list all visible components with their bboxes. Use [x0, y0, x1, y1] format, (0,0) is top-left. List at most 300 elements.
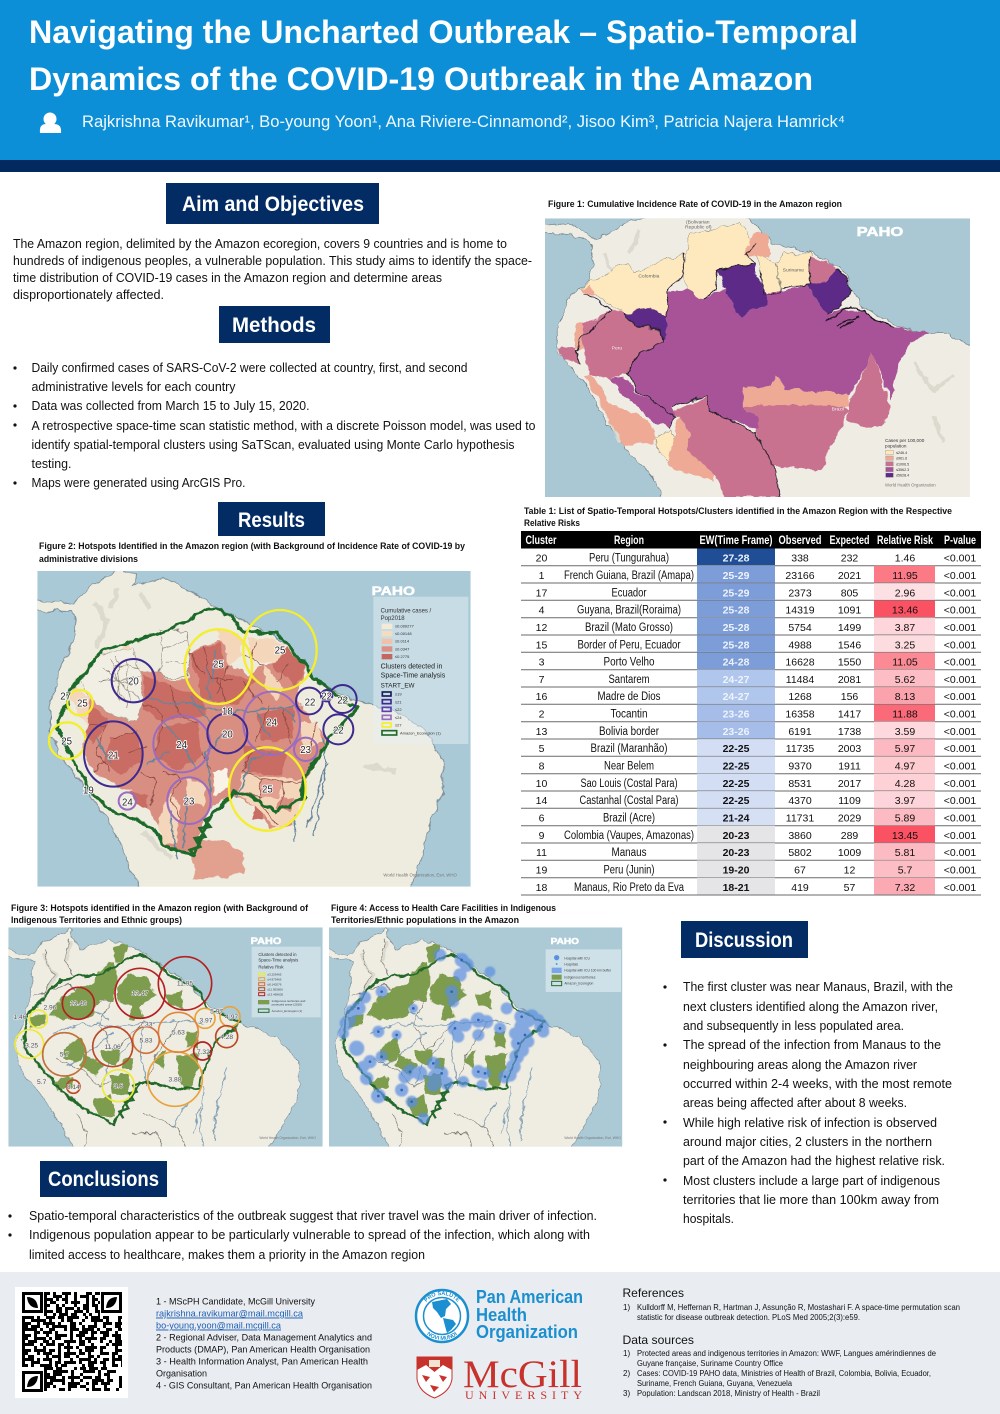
legend: Indigenous territories and — [272, 999, 306, 1003]
map: figure 2 hotspots — [20, 568, 471, 898]
row: cluster 9 — [539, 830, 976, 842]
row: cluster 2: 11.88 — [892, 709, 918, 721]
row: cluster 4 — [539, 605, 976, 617]
row: cluster 2 — [539, 709, 976, 721]
map: figure 3 hotspots and indigenous territories — [0, 927, 323, 1160]
row: cluster 7: <0.001 — [944, 674, 976, 686]
text block: discussion bullets: around major cities, 2 clusters in the northern — [683, 1134, 932, 1149]
text block: methods bullets: Maps were generated using ArcGIS Pro. — [32, 475, 246, 490]
row: cluster 5: 11735 — [786, 743, 814, 755]
text block: conclusions bullets — [8, 1208, 597, 1262]
text block: methods bullets: Data was collected from March 15 to July 15, 2020. — [32, 398, 310, 413]
row: cluster 14: Castanhal (Costal Para) — [580, 795, 679, 807]
row: cluster 3: 1550 — [838, 657, 861, 669]
caption: figure 3: Indigenous Territories and Ethnic groups) — [11, 915, 182, 926]
cluster labels — [14, 981, 238, 1091]
map labels: (Bolivarian — [686, 219, 710, 225]
table: clusters — [521, 531, 981, 895]
row: cluster 15: 15 — [536, 639, 547, 651]
legend: ≤3.253465 — [267, 973, 282, 977]
table header: EW(Time Frame) — [700, 535, 773, 547]
table row lines — [521, 566, 981, 895]
title — [29, 14, 858, 97]
row: cluster 20: 20 — [536, 553, 547, 565]
row: cluster 20: <0.001 — [944, 553, 976, 565]
cluster labels: 11.95 — [177, 981, 193, 988]
cluster labels: 25 — [77, 698, 88, 709]
row: cluster 7: 24-27 — [723, 674, 750, 686]
cluster labels: 5.7 — [60, 1052, 69, 1059]
footer band — [0, 1272, 1000, 1414]
PAHO logo text: PAHO — [551, 936, 579, 946]
text block: references: 1) — [623, 1303, 630, 1312]
row: cluster 17: Ecuador — [612, 587, 647, 599]
legend: ≤4.973465 — [267, 978, 282, 982]
cluster labels: 20 — [222, 729, 233, 740]
text block: data sources: Protected areas and indigenous territories in Amazon: WWF, Langues amérindiennes de — [637, 1349, 937, 1358]
legend: Amazon_Ecoregion — [564, 982, 594, 986]
row: cluster 16: 1268 — [788, 691, 812, 703]
heading: Conclusions — [40, 1161, 167, 1197]
legend: Amazon_Ecoregion (1) — [272, 1009, 302, 1013]
cluster labels: 23 — [184, 796, 194, 807]
map labels: Republic of) — [685, 225, 712, 231]
PAHO logo text: PAHO — [857, 224, 903, 239]
row: cluster 18: 57 — [844, 882, 855, 894]
legend: Hospitals — [564, 962, 578, 966]
cluster labels: 22 — [337, 696, 348, 707]
row: cluster 18: 18-21 — [723, 882, 750, 894]
row: cluster 4: 1091 — [838, 605, 861, 617]
row: cluster 7: 7 — [539, 674, 545, 686]
row: cluster 14: 1109 — [838, 795, 861, 807]
cluster labels: 2.96 — [44, 1005, 57, 1012]
map credit: World Health Organization, Esri, WHO — [259, 1136, 316, 1140]
legend panel: ≤21 — [395, 699, 402, 704]
row: cluster 3: Porto Velho — [604, 657, 654, 669]
row: cluster 5: Brazil (Maranhão) — [590, 743, 668, 755]
cluster labels: 24 — [266, 718, 278, 729]
authors: Rajkrishna Ravikumar¹, Bo-young Yoon¹, Ana Riviere-Cinnamond², Jisoo Kim³, Patricia Najera Hamrick⁴ — [82, 113, 845, 131]
row: cluster 13: 6191 — [788, 726, 812, 738]
text block: conclusions bullets: Spatio-temporal characteristics of the outbreak suggest that river travel was the main driver of infection. — [29, 1208, 597, 1223]
legend panel: ≤24 — [395, 715, 402, 720]
row: cluster 14 — [536, 795, 976, 807]
logo: Pan American Health Organization: Organization — [476, 1321, 578, 1342]
row: cluster 1: 2021 — [838, 570, 861, 582]
row: cluster 14: 14 — [536, 795, 547, 807]
legend: ≤3562.3 — [896, 468, 909, 472]
header band — [0, 0, 1000, 172]
map labels: Ecuador — [580, 317, 599, 323]
map: figure 4 health care access — [329, 927, 622, 1147]
row: cluster 9: 289 — [841, 830, 858, 842]
row: cluster 13: 13 — [536, 726, 547, 738]
text block: affiliations — [156, 1296, 372, 1392]
row: cluster 14: 22-25 — [723, 795, 750, 807]
row: cluster 12: Brazil (Mato Grosso) — [585, 622, 673, 634]
caption: figure 2: administrative divisions — [39, 554, 138, 565]
table header: Expected — [830, 535, 870, 547]
row: cluster 10: 4.28 — [895, 778, 915, 790]
row: cluster 8: 1911 — [838, 761, 861, 773]
text block: data sources: Guyane française, Suriname Country Office — [637, 1359, 784, 1368]
text block: references: statistic for disease outbreak detection. PLoS Med 2005;2(3):e59. — [637, 1313, 860, 1322]
row: cluster 16: 8.13 — [895, 691, 915, 703]
row: cluster 7: 11484 — [786, 674, 814, 686]
row: cluster 3: 11.05 — [892, 657, 918, 669]
map labels: Suriname — [783, 267, 804, 273]
logo: Pan American Health Organization — [414, 1286, 583, 1344]
PAHO logo text: PAHO — [372, 584, 415, 598]
row: cluster 10: 2017 — [838, 778, 861, 790]
row: cluster 3: 24-28 — [723, 657, 750, 669]
row: cluster 12: 5754 — [788, 622, 812, 634]
map credit: World Health Organization, Esri, WHO — [564, 1136, 621, 1140]
row: cluster 6: 5.89 — [895, 813, 915, 825]
row: cluster 5: 5 — [539, 743, 545, 755]
row: cluster 17: 17 — [536, 587, 547, 599]
row: cluster 13: 1738 — [838, 726, 861, 738]
title: Navigating the Uncharted Outbreak – Spatio-Temporal — [29, 14, 858, 50]
text block: affiliations: bo-young.yoon@mail.mcgill.ca — [156, 1320, 282, 1332]
text block: aim: time distribution of COVID-19 cases in the Amazon region and determine areas — [13, 270, 442, 285]
logo: Pan American Health Organization: NOVI MUNDI — [427, 1332, 457, 1340]
row: cluster 5 — [539, 743, 976, 755]
text block: references — [622, 1286, 960, 1322]
row: cluster 15: 25-28 — [723, 639, 750, 651]
legend panel: Space-Time analysis — [381, 673, 446, 680]
row: cluster 19: Peru (Junin) — [604, 864, 655, 876]
row: cluster 1: 23166 — [785, 570, 815, 582]
row: cluster 6: 21-24 — [723, 813, 750, 825]
row: cluster 5: <0.001 — [944, 743, 976, 755]
legend: ≤1006.5 — [896, 462, 909, 466]
row: cluster 3 — [539, 657, 976, 669]
row: cluster 18: 18 — [536, 882, 547, 894]
heading: Aim and Objectives: Aim and Objectives — [182, 193, 364, 216]
row: cluster 16: 24-27 — [723, 691, 750, 703]
logo: McGill University — [417, 1353, 582, 1402]
PAHO logo text: PAHO — [251, 936, 281, 946]
row: cluster 14: <0.001 — [944, 795, 976, 807]
row: cluster 20: 232 — [841, 553, 858, 565]
row: cluster 13: <0.001 — [944, 726, 976, 738]
text block: discussion bullets: The first cluster was near Manaus, Brazil, with the — [683, 979, 953, 994]
row: cluster 11: Manaus — [612, 847, 647, 859]
legend: ≤961.6 — [896, 457, 907, 461]
legend panel: Pop2018 — [381, 616, 405, 622]
row: cluster 1: French Guiana, Brazil (Amapa) — [564, 570, 694, 582]
row: cluster 17: 2.96 — [895, 587, 915, 599]
row: cluster 6: 11731 — [786, 813, 814, 825]
hospital points — [357, 959, 543, 1103]
text block: data sources: Data sources — [622, 1333, 694, 1347]
caption: table 1: Relative Risks — [524, 518, 580, 529]
icon: author person — [40, 112, 61, 133]
cluster labels: 3.25 — [25, 1042, 38, 1049]
row: cluster 11: 5802 — [788, 847, 812, 859]
logo: Pan American Health Organization: Pan American — [476, 1286, 583, 1307]
table header: P-value — [944, 535, 976, 547]
text block: methods bullets: identify spatial-temporal clusters using SaTScan, evaluated using Monte Carlo hypothesis — [32, 437, 515, 452]
legend: Hospital with ICU — [564, 956, 590, 960]
row: cluster 10: <0.001 — [944, 778, 976, 790]
logo: McGill University: McGill — [463, 1353, 582, 1396]
legend panel: ≤0.00148 — [395, 631, 412, 636]
text block: conclusions bullets: Indigenous population appear to be particularly vulnerable to spread of the infection, which along with — [29, 1227, 590, 1242]
legend panel — [373, 597, 468, 744]
Amazon ecoregion outline — [57, 608, 357, 855]
row: cluster 9: 20-23 — [723, 830, 750, 842]
row: cluster 20: Peru (Tungurahua) — [589, 553, 669, 565]
text block: discussion bullets: occurred within 2-4 weeks, with the most remote — [683, 1076, 952, 1091]
row: cluster 11 — [536, 847, 976, 859]
hospital buffers — [338, 949, 549, 1124]
cluster labels: 4.97 — [225, 1014, 238, 1021]
row: cluster 8: 4.97 — [895, 761, 915, 773]
table header: Region — [614, 535, 644, 547]
row: cluster 2: 1417 — [838, 709, 861, 721]
row: cluster 18: 419 — [791, 882, 809, 894]
row: cluster 18: 7.32 — [895, 882, 915, 894]
text block: affiliations: Organisation — [156, 1368, 207, 1380]
row: cluster 15 — [536, 639, 976, 651]
row: cluster 8: 22-25 — [723, 761, 750, 773]
text block: affiliations: 3 - Health Information Analyst, Pan American Health — [156, 1356, 368, 1368]
heading: Methods — [219, 306, 330, 343]
caption: figure 4 — [331, 903, 556, 926]
cluster labels: 22 — [333, 725, 344, 736]
cluster circles: yellow — [49, 610, 317, 831]
cluster labels: 23 — [300, 745, 311, 756]
logo: Pan American Health Organization: PRO SALUTE — [424, 1291, 460, 1302]
text block: references: Kulldorff M, Heffernan R, Hartman J, Assunção R, Mostashari F. A space-time permutation scan — [637, 1303, 960, 1312]
text block: discussion bullets: While high relative risk of infection is observed — [683, 1115, 937, 1130]
row: cluster 5: 22-25 — [723, 743, 750, 755]
legend: ≤11.955606 — [267, 988, 283, 992]
cluster labels: 25 — [213, 660, 224, 671]
row: cluster 2: Tocantin — [610, 709, 648, 721]
row: cluster 17: 2373 — [788, 587, 812, 599]
cluster circles: dark purple — [84, 659, 357, 787]
row: cluster 3: 16628 — [785, 657, 815, 669]
row: cluster 17: <0.001 — [944, 587, 976, 599]
row: cluster 19: <0.001 — [944, 864, 976, 876]
text block: discussion bullets: territories that lie more than 100km away from — [683, 1192, 939, 1207]
legend panel: Clusters detected in — [381, 664, 443, 671]
heading: Results — [218, 502, 325, 536]
legend — [885, 438, 925, 478]
text block: discussion bullets: next clusters identified along the Amazon river, — [683, 999, 938, 1014]
text block: methods bullets — [13, 360, 535, 490]
row: cluster 4: 13.46 — [892, 605, 918, 617]
row: cluster 6: 6 — [539, 813, 545, 825]
legend — [546, 949, 621, 992]
row: cluster 2: 23-26 — [723, 709, 750, 721]
legend: Indigenous territories — [564, 975, 596, 979]
cluster labels: 5.7 — [37, 1079, 47, 1086]
row: cluster 2: <0.001 — [944, 709, 976, 721]
legend panel: ≤19 — [395, 692, 402, 697]
legend: Hospital with ICU 100 km buffer — [564, 969, 612, 973]
row: cluster 15: Border of Peru, Ecuador — [578, 639, 681, 651]
cluster labels — [60, 646, 348, 809]
legend panel: ≤0.0347 — [395, 646, 410, 651]
legend panel: ≤27 — [395, 723, 402, 728]
text block: discussion bullets: hospitals. — [683, 1211, 734, 1226]
row: cluster 8: <0.001 — [944, 761, 976, 773]
heading: Results: Results — [238, 509, 305, 532]
legend: population — [885, 443, 907, 448]
cluster labels: 5.63 — [172, 1030, 185, 1037]
cluster labels: 3.6 — [114, 1083, 123, 1090]
text block: methods bullets: testing. — [32, 456, 72, 471]
row: cluster 12: 12 — [536, 622, 547, 634]
row: cluster 19: 19 — [536, 864, 547, 876]
row: cluster 5: 2003 — [838, 743, 861, 755]
row: cluster 1: <0.001 — [944, 570, 976, 582]
row: cluster 16 — [536, 691, 976, 703]
row: cluster 13: Bolivia border — [599, 726, 659, 738]
row: cluster 11: 5.81 — [895, 847, 915, 859]
text block: data sources: 3) — [623, 1389, 630, 1398]
legend panel: ≤0.2775 — [395, 654, 410, 659]
cluster labels: 8.14 — [67, 1084, 80, 1091]
logo: McGill University: UNIVERSITY — [465, 1388, 582, 1402]
cluster labels: 24 — [176, 740, 188, 751]
text block: data sources — [622, 1333, 937, 1398]
row: cluster 9: 3860 — [788, 830, 812, 842]
row: cluster 10: 22-25 — [723, 778, 750, 790]
legend: Relative Risk — [258, 965, 284, 970]
text block: discussion bullets: Most clusters include a large part of indigenous — [683, 1173, 940, 1188]
caption: figure 4: Territories/Ethnic populations in the Amazon — [331, 915, 519, 926]
cluster labels: 20 — [128, 677, 139, 688]
cluster labels: 7.32 — [197, 1049, 210, 1056]
row: cluster 19 — [536, 864, 976, 876]
row: cluster 4: 14319 — [785, 605, 815, 617]
row: cluster 5: 5.97 — [895, 743, 915, 755]
text block: discussion bullets: neighbouring areas along the Amazon river — [683, 1057, 918, 1072]
table EW time-frame cells — [697, 548, 775, 894]
text block: discussion bullets — [663, 979, 953, 1226]
row: cluster 8: 8 — [539, 761, 545, 773]
legend: ≤5628.4 — [896, 474, 909, 478]
row: cluster 9: Colombia (Vaupes, Amazonas) — [564, 830, 694, 842]
caption: figure 4: Figure 4: Access to Health Care Facilities in Indigenous — [331, 903, 556, 914]
row: cluster 17 — [536, 587, 976, 599]
text block: aim — [13, 236, 532, 302]
cluster labels: 24 — [122, 798, 133, 809]
row: cluster 7: 5.62 — [895, 674, 915, 686]
row: cluster 9: 9 — [539, 830, 545, 842]
row: cluster 11: <0.001 — [944, 847, 976, 859]
row: cluster 11: 20-23 — [723, 847, 750, 859]
legend: protected areas (2018) — [272, 1002, 302, 1006]
cluster labels: 25 — [262, 785, 273, 796]
map labels — [580, 219, 844, 413]
row: cluster 20: 1.46 — [895, 553, 915, 565]
cluster labels: 22 — [321, 692, 332, 703]
row: cluster 9: <0.001 — [944, 830, 976, 842]
row: cluster 19: 12 — [844, 864, 855, 876]
text block: affiliations: Products (DMAP), Pan American Health Organisation — [156, 1344, 370, 1356]
row: cluster 2: 16358 — [785, 709, 815, 721]
legend — [252, 947, 321, 1017]
caption: figure 2 — [39, 541, 466, 565]
cluster labels: 1.46 — [14, 1014, 27, 1021]
row: cluster 11: 11 — [536, 847, 547, 859]
row: cluster 6: <0.001 — [944, 813, 976, 825]
row: cluster 15: 4988 — [788, 639, 812, 651]
text block: discussion bullets: areas being affected after about 8 weeks. — [683, 1095, 907, 1110]
text block: data sources: Population: Landscan 2018, Ministry of Health - Brazil — [637, 1389, 820, 1398]
row: cluster 16: <0.001 — [944, 691, 976, 703]
legend panel: Cumulative cases / — [381, 609, 432, 615]
row: cluster 16: Madre de Dios — [598, 691, 661, 703]
row: cluster 18 — [536, 882, 976, 894]
text block: conclusions bullets: limited access to healthcare, makes them a priority in the Amazon region — [29, 1247, 425, 1262]
row: cluster 20: 27-28 — [723, 553, 750, 565]
heading: Methods: Methods — [232, 314, 316, 337]
heading: Conclusions: Conclusions — [48, 1168, 159, 1191]
table header: Relative Risk — [877, 535, 933, 547]
cluster labels: 25 — [275, 646, 285, 657]
icon: QR code — [15, 1287, 128, 1398]
text block: methods bullets: Daily confirmed cases of SARS-CoV-2 were collected at country, first, and second — [32, 360, 468, 375]
row: cluster 14: 3.97 — [895, 795, 915, 807]
heading: Discussion — [681, 921, 808, 958]
row: cluster 14: 4370 — [788, 795, 812, 807]
row: cluster 19: 67 — [794, 864, 806, 876]
legend: ≤246.4 — [896, 451, 907, 455]
row: cluster 6 — [539, 813, 976, 825]
text block: discussion bullets: and subsequently in less populated area. — [683, 1018, 904, 1033]
cluster labels: 13.46 — [70, 1001, 87, 1008]
legend panel: ≤0.0114 — [395, 639, 410, 644]
caption: table 1 — [524, 506, 952, 529]
row: cluster 2: 2 — [539, 709, 545, 721]
caption: figure 3 — [11, 903, 309, 926]
map credit: World Health Organization, Esri, WHO — [383, 872, 457, 877]
row: cluster 7 — [539, 674, 976, 686]
row: cluster 12: <0.001 — [944, 622, 976, 634]
cluster labels: 18 — [222, 706, 233, 717]
row: cluster 4: Guyana, Brazil(Roraima) — [577, 605, 681, 617]
text block: discussion bullets: The spread of the infection from Manaus to the — [683, 1037, 941, 1052]
row: cluster 18: <0.001 — [944, 882, 976, 894]
row: cluster 6: 2029 — [838, 813, 861, 825]
map labels: Colombia — [638, 274, 660, 280]
text block: affiliations: 4 - GIS Consultant, Pan American Health Organisation — [156, 1380, 372, 1392]
row: cluster 12: 1499 — [838, 622, 861, 634]
map labels: Peru — [612, 345, 622, 351]
row: cluster 4: <0.001 — [944, 605, 976, 617]
row: cluster 10: Sao Louis (Costal Para) — [580, 778, 678, 790]
row: cluster 10 — [536, 778, 976, 790]
cluster labels: 7.33 — [140, 1022, 153, 1029]
map credit: World Health Organization — [885, 483, 936, 488]
text block: discussion bullets: part of the Amazon had the highest relative risk. — [683, 1153, 945, 1168]
row: cluster 17: 25-29 — [723, 587, 750, 599]
text block: methods bullets: administrative levels for each country — [32, 379, 236, 394]
legend: ≤13.469605 — [267, 993, 283, 997]
legend panel: Amazon_Ecoregion (1) — [400, 730, 441, 735]
text block: data sources: Cases: COVID-19 PAHO data, Ministries of Health of Brazil, Colombia, Bolivia, Ecuador, — [637, 1369, 931, 1378]
row: cluster 12: 3.87 — [895, 622, 915, 634]
text block: aim: hundreds of indigenous peoples, a vulnerable population. This study aims to identify the space- — [13, 253, 532, 268]
